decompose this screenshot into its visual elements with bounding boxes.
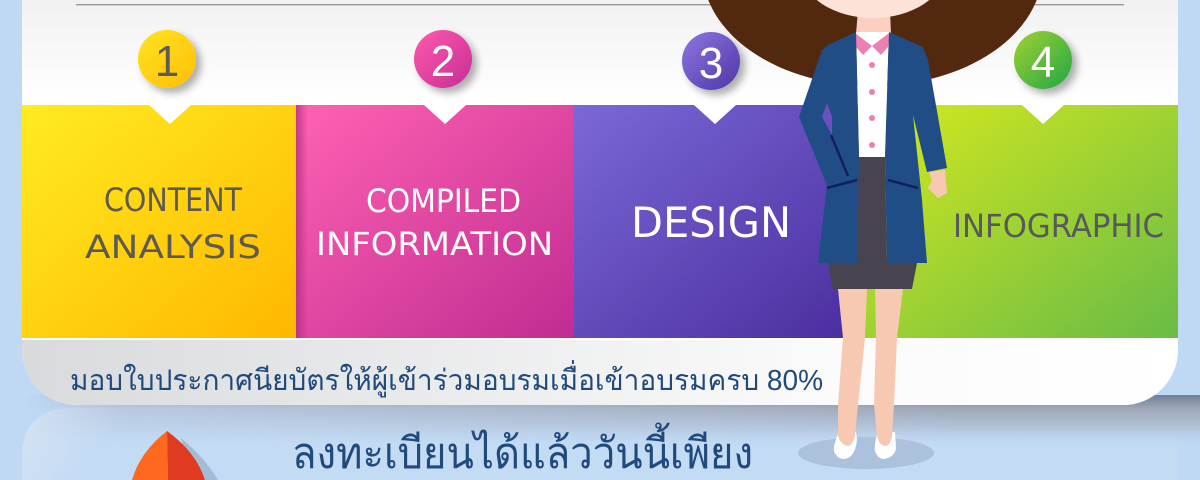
label: infographic: INFOGRAPHIC [953, 207, 1164, 245]
step 2 band [296, 105, 574, 338]
blazer pockets [827, 135, 918, 188]
label: content analysis [85, 181, 261, 266]
label: design: DESIGN [631, 198, 791, 247]
registration heading: ลงทะเบียนได้แล้ววันนี้เพียง [292, 422, 753, 478]
step 3 band [574, 105, 860, 338]
step 1 band [22, 105, 296, 338]
skirt [828, 157, 917, 289]
label: compiled information [316, 182, 553, 263]
figure: woman in blue blazer [702, 0, 1042, 469]
number badge 3 [682, 32, 740, 90]
number badge 2: 2 [431, 37, 455, 86]
panel: four process steps [22, 105, 1178, 338]
lower registration panel [22, 408, 1178, 480]
collar [855, 33, 889, 55]
number badge 4: 4 [1031, 38, 1055, 87]
hand [928, 170, 947, 198]
blazer [799, 32, 947, 263]
step 2 band edge shade [296, 105, 308, 338]
legs [838, 289, 903, 446]
label: content analysis: ANALYSIS [85, 228, 261, 266]
icon: rocket [132, 431, 218, 480]
certificate text: มอบใบประกาศนียบัตรให้ผู้เข้าร่วมอบรมเมื่อเข้าอบรมครบ 80% [70, 360, 823, 398]
arm gap [822, 103, 832, 135]
number badge 3: 3 [699, 39, 723, 88]
floor shadow [798, 437, 934, 469]
shoes [834, 432, 896, 459]
label: compiled information: INFORMATION [316, 225, 553, 263]
panel shadow [49, 395, 1200, 438]
number badge 1: 1 [155, 37, 179, 86]
label: compiled information: COMPILED [366, 182, 521, 220]
bottom certificate strip [22, 340, 1178, 405]
number badge 1 [138, 30, 196, 88]
shirt [856, 32, 889, 157]
neck [856, 10, 891, 48]
buttons [869, 62, 875, 148]
number badge 2 [414, 30, 472, 88]
hair [702, 0, 1042, 86]
label: content analysis: CONTENT [104, 181, 242, 219]
number badge 4 [1014, 31, 1072, 89]
face [801, 0, 945, 18]
step 4 band [860, 105, 1178, 338]
top divider [76, 4, 1124, 5]
